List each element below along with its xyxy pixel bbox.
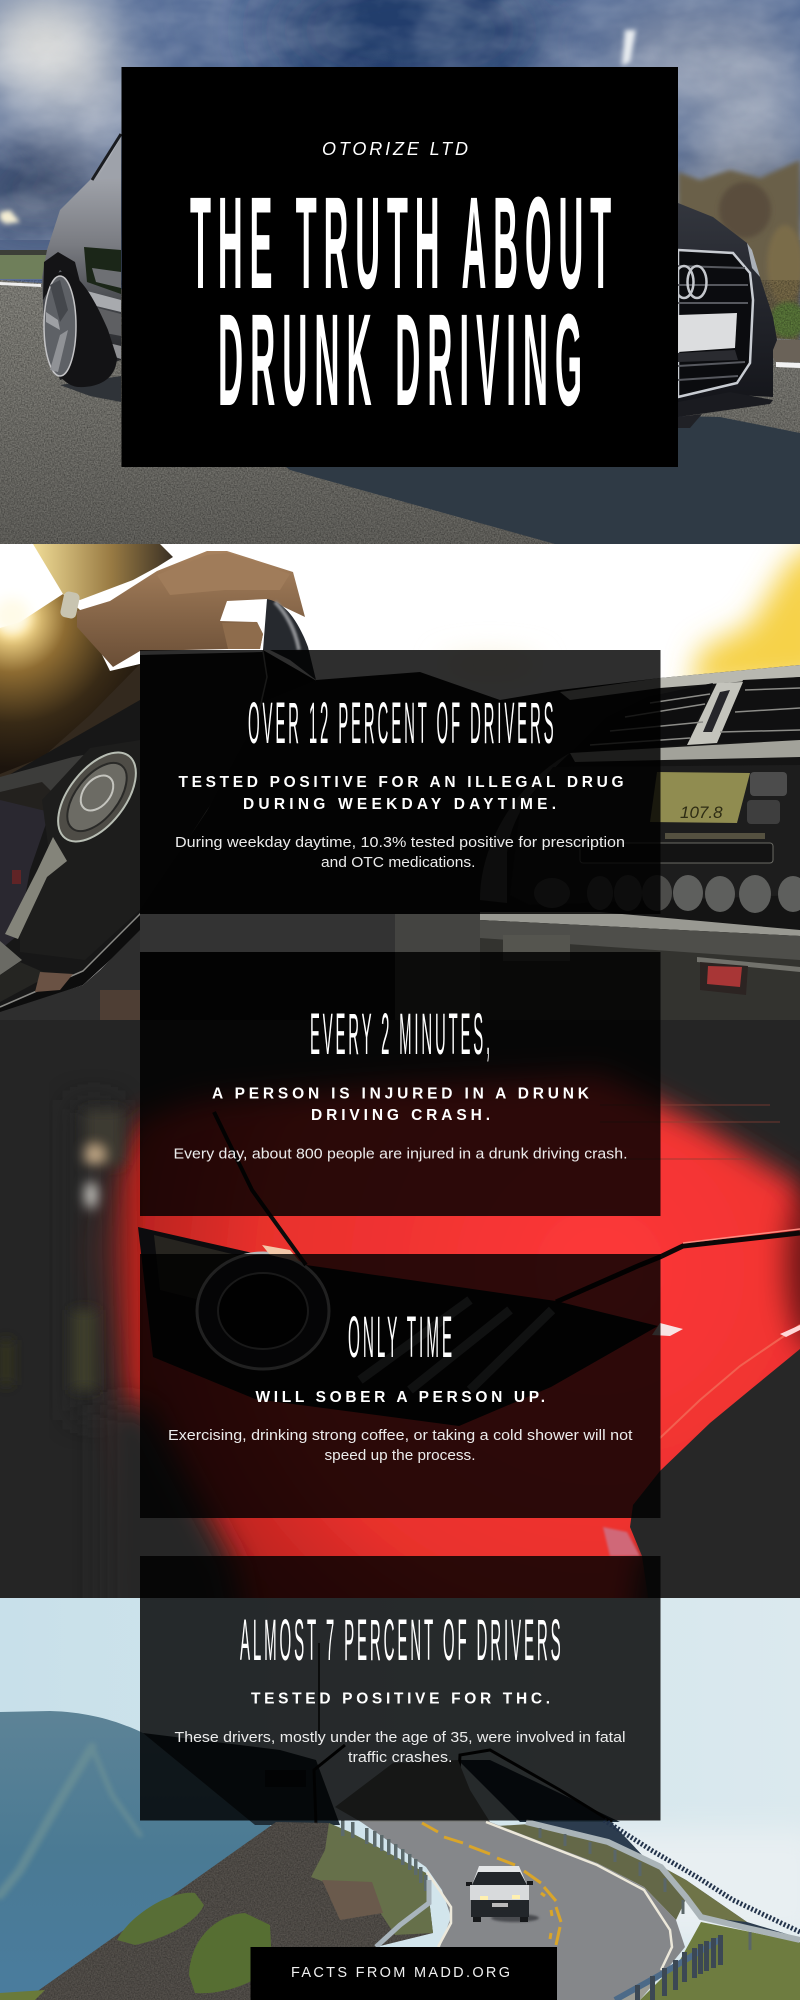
guard rails bbox=[341, 1820, 800, 2000]
panel: fact over 12 percent bbox=[140, 650, 660, 914]
footer: source bbox=[250, 1947, 557, 2000]
panel: fact only time: ONLY TIME bbox=[348, 1305, 455, 1370]
panel: fact only time bbox=[140, 1254, 660, 1518]
steering wheel rim bbox=[263, 599, 316, 680]
panel: fact every 2 minutes bbox=[140, 952, 660, 1216]
car right side bbox=[674, 203, 777, 428]
body text: speed up the process. bbox=[324, 1447, 476, 1464]
subheading: TESTED POSITIVE FOR AN ILLEGAL DRUG bbox=[178, 774, 624, 791]
photo: hand on steering wheel and dashboard: 107.8 bbox=[680, 803, 723, 822]
body text bbox=[174, 1729, 626, 1766]
brand name: OTORIZE LTD bbox=[322, 139, 468, 159]
photo: coastal road with white car bbox=[0, 1598, 800, 2000]
footer: source: FACTS FROM MADD.ORG bbox=[291, 1965, 510, 1981]
body text: and OTC medications. bbox=[321, 854, 476, 871]
body text bbox=[168, 1427, 633, 1464]
panel: title bbox=[122, 67, 678, 467]
photo: red car headlight bbox=[0, 1066, 800, 1598]
subheading: DURING WEEKDAY DAYTIME. bbox=[243, 796, 556, 813]
body text bbox=[175, 834, 625, 871]
subheading: WILL SOBER A PERSON UP. bbox=[256, 1389, 545, 1406]
rocky hill bbox=[25, 1822, 433, 2000]
bumper and wheel arch bbox=[630, 1349, 800, 1584]
grass lower right bbox=[640, 1922, 800, 2000]
subheading: A PERSON IS INJURED IN A DRUNK bbox=[212, 1086, 590, 1102]
sleeve bbox=[0, 594, 140, 774]
white car bbox=[466, 1866, 539, 1922]
road bbox=[361, 1822, 685, 2000]
dark interior behind wheel bbox=[0, 664, 140, 777]
far hill under panel bbox=[143, 1733, 340, 1825]
body text: Every day, about 800 people are injured in a drunk driving crash. bbox=[174, 1146, 628, 1162]
hand bbox=[77, 551, 305, 667]
shrubs bbox=[0, 1893, 272, 2000]
slope behind guard rail bbox=[538, 1822, 788, 1934]
body text: Exercising, drinking strong coffee, or taking a cold shower will not bbox=[168, 1427, 633, 1444]
subheading: TESTED POSITIVE FOR THC. bbox=[251, 1690, 550, 1708]
subheading bbox=[178, 774, 624, 813]
body text: These drivers, mostly under the age of 35, were involved in fatal bbox=[174, 1729, 626, 1746]
car left side bbox=[42, 133, 121, 387]
yellow road markings bbox=[422, 1823, 561, 1945]
body text: traffic crashes. bbox=[348, 1749, 452, 1766]
body text: During weekday daytime, 10.3% tested positive for prescription bbox=[175, 834, 625, 851]
panel: fact almost 7 percent bbox=[140, 1556, 660, 1820]
photo: hand on steering wheel and dashboard bbox=[0, 535, 800, 1020]
headlight bbox=[138, 1112, 800, 1426]
photo: car under a cloudy sky bbox=[0, 0, 800, 544]
roadside weeds bbox=[678, 160, 800, 345]
subheading bbox=[212, 1086, 590, 1124]
dashboard bbox=[140, 665, 800, 1020]
subheading: DRIVING CRASH. bbox=[311, 1107, 490, 1124]
wheel spokes and hub bbox=[0, 755, 84, 792]
mountain bbox=[0, 1711, 271, 1993]
